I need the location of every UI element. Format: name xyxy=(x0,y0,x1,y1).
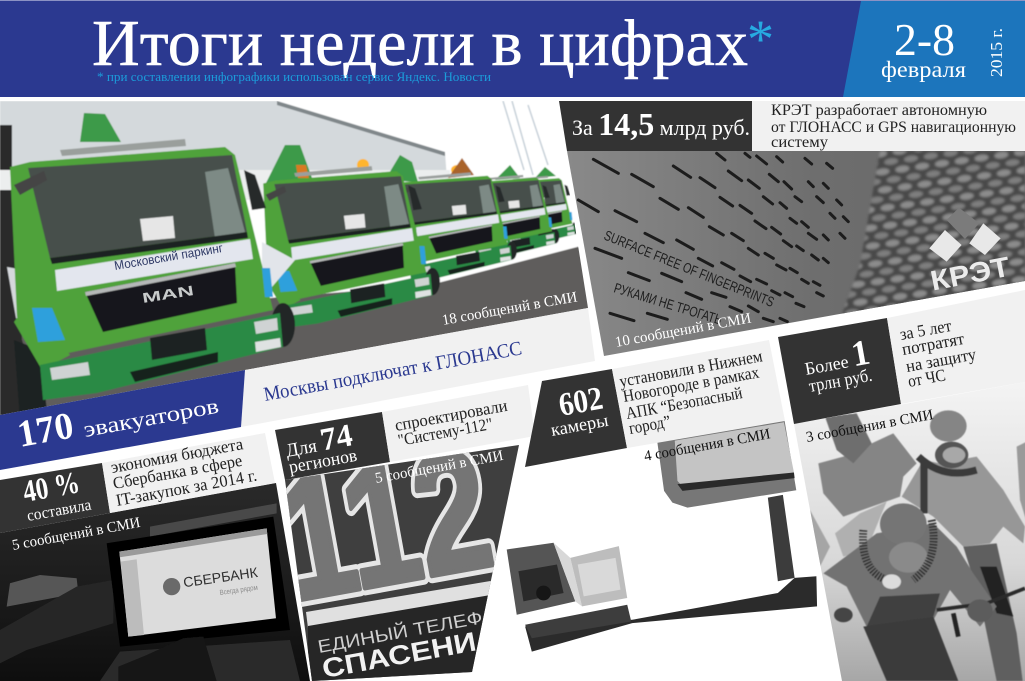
date panel xyxy=(843,1,1025,97)
media count: KRET: 10 сообщений в СМИ xyxy=(614,310,753,351)
text: cameras description: АПК “Безопасный xyxy=(624,383,744,423)
title: Итоги недели в цифрах xyxy=(92,7,748,80)
block: 602 cameras number xyxy=(525,369,627,467)
label: tow trucks: эвакуаторов xyxy=(81,393,221,442)
strip: tow trucks caption xyxy=(241,308,595,427)
text: emergency description: за 5 лет xyxy=(898,316,953,344)
panel: 112 photo xyxy=(285,445,519,681)
stamped text: SURFACE FREE OF FINGERPRINTS xyxy=(602,227,777,310)
text: Sberbank description: Сбербанка в сфере xyxy=(111,451,244,493)
number: 40 percent: 40 % xyxy=(20,464,82,509)
panel: KRET photo xyxy=(560,151,1025,361)
caption: Moscow GLONASS: Москвы подключат к ГЛОНАСС xyxy=(262,337,524,406)
number: 74 regions: Для 74 xyxy=(282,416,355,464)
footnote: * при составлении инфографики использован сервис Яндекс. Новости xyxy=(97,69,491,84)
block: 602 cameras description xyxy=(612,340,785,448)
text: system 112 description: "Систему-112" xyxy=(396,414,494,450)
text: system 112 description: спроектировали xyxy=(393,396,509,435)
panel: Sberbank photo: СБЕРБАНК xyxy=(182,564,260,590)
label: regions: регионов xyxy=(287,445,359,477)
text: cameras description: установили в Нижнем xyxy=(618,346,764,391)
stamped text Russian: РУКАМИ НЕ ТРОГАТЬ xyxy=(612,280,724,328)
panel: Sberbank photo: Всегда рядом xyxy=(219,583,258,597)
date month: февраля xyxy=(881,57,966,82)
block: KRET number xyxy=(559,101,752,151)
panel: tow trucks photo xyxy=(0,101,600,421)
panel: rescuers photo xyxy=(790,380,1025,681)
date year: 2015 г. xyxy=(987,28,1006,77)
panel: cameras photo xyxy=(507,421,817,652)
block: 1 trillion description xyxy=(887,290,1025,404)
label: amounted: составила xyxy=(26,497,93,525)
number: more than 1: Более 1 xyxy=(800,332,873,383)
text: Sberbank description: IT-закупок за 2014 г. xyxy=(114,466,258,510)
truck brand: MAN xyxy=(141,282,195,306)
label: cameras: камеры xyxy=(549,410,610,440)
panel: 112 photo: ЕДИНЫЙ ТЕЛЕФ xyxy=(316,606,484,657)
strip: tow trucks number xyxy=(0,370,245,470)
icon: KRET logo: КРЭТ xyxy=(928,251,1012,297)
media count: cameras: 4 сообщения в СМИ xyxy=(643,426,772,465)
block: 40 percent description xyxy=(102,433,275,513)
block: 1 trillion number xyxy=(778,318,901,424)
block: 74 regions description xyxy=(382,385,535,462)
text: emergency description: от ЧС xyxy=(906,365,947,391)
text: KRET description: систему xyxy=(771,134,828,151)
panel: Sberbank photo xyxy=(0,480,320,681)
text: cameras description: город” xyxy=(627,412,672,438)
number: 170: 170 xyxy=(14,405,77,456)
block: 74 regions number xyxy=(275,412,390,480)
text: emergency description: на защиту xyxy=(904,344,978,376)
text: KRET description: КРЭТ разработает автономную xyxy=(771,102,987,119)
text: Sberbank description: экономия бюджета xyxy=(109,434,245,477)
media count: emergency: 3 сообщения в СМИ xyxy=(805,407,935,446)
number: 602: 602 xyxy=(556,381,606,424)
numerals 112 fill: 112 xyxy=(265,411,504,637)
media count: 112: 5 сообщений в СМИ xyxy=(374,448,505,487)
numerals 112 outline: 112 xyxy=(265,411,504,637)
text: KRET description: от ГЛОНАСС и GPS навигационную xyxy=(771,119,1016,136)
text: Sberbank description xyxy=(109,434,258,510)
text: emergency description xyxy=(898,316,978,391)
media count: Sberbank: 5 сообщений в СМИ xyxy=(11,515,142,554)
media count: trucks: 18 сообщений в СМИ xyxy=(441,289,579,329)
label: trillion rubles: трлн руб. xyxy=(807,365,874,396)
block: 40 percent number xyxy=(0,463,110,533)
text: cameras description xyxy=(618,346,764,438)
block: KRET description xyxy=(752,101,1025,151)
text: KRET description xyxy=(771,102,1016,151)
truck band label: Московский паркинг xyxy=(113,241,224,273)
date range: 2-8 xyxy=(894,14,955,65)
number: 14.5 billion: За 14,5 млрд руб. xyxy=(572,106,750,142)
text: emergency description: потратят xyxy=(900,329,966,359)
icon: KRET logo xyxy=(928,208,1012,297)
header bar xyxy=(0,0,1025,97)
text: cameras description: Новогороде в рамках xyxy=(621,362,761,406)
title asterisk: * xyxy=(747,9,774,69)
